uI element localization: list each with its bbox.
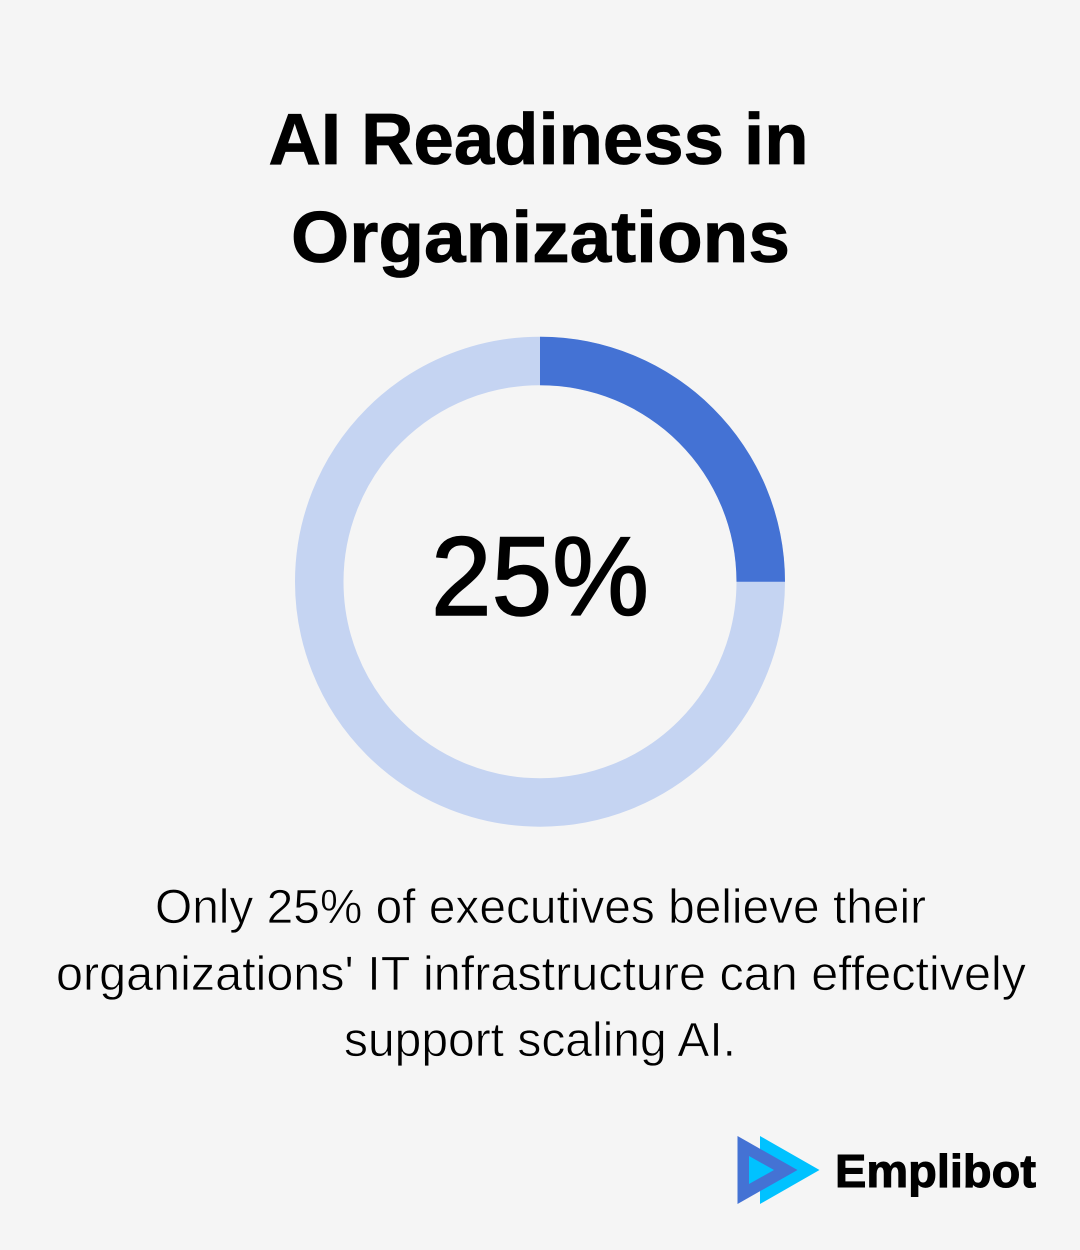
donut highlighted segment [540,337,785,582]
center value: 25% [431,514,649,639]
description text: support scaling AI. [344,1014,736,1067]
donut track [319,361,761,802]
title: AI Readiness in [268,100,808,180]
title [268,100,808,278]
wordmark: Emplibot [835,1145,1036,1197]
donut chart: 25% [319,337,785,802]
description text [56,881,1026,1067]
description text: organizations' IT infrastructure can effectively [56,948,1026,1001]
icon: play triangles [738,1136,820,1204]
logo: Emplibot [738,1136,1036,1204]
title: Organizations [291,198,790,278]
description text: Only 25% of executives believe their [155,881,926,934]
